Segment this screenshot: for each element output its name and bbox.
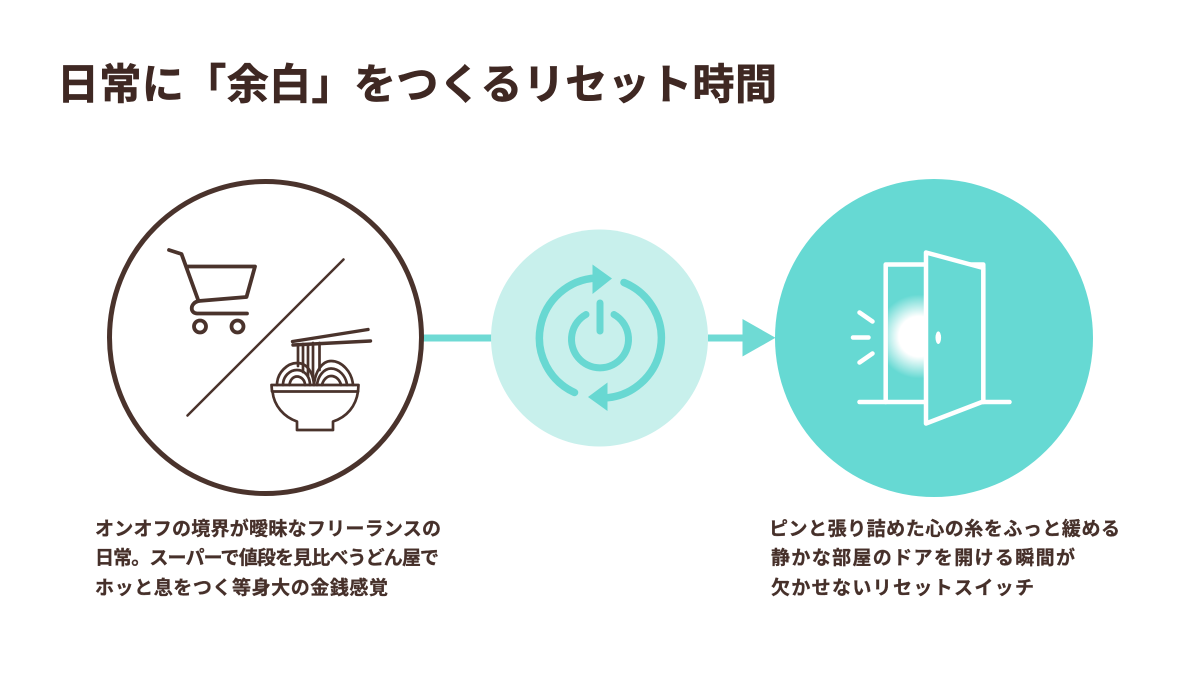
connector line: left circle to center circle — [422, 334, 492, 342]
icon: light behind door — [888, 296, 924, 378]
text block: right caption: 欠かせないリセットスイッチ — [771, 576, 1034, 599]
icon: opening door — [853, 252, 1010, 424]
text block: right caption: 静かな部屋のドアを開ける瞬間が — [771, 546, 1075, 569]
panel: daily life circle — [110, 182, 422, 494]
panel: door circle — [775, 179, 1093, 497]
divider slash — [188, 260, 344, 416]
panel: reset circle — [491, 230, 708, 446]
icon: noodle bowl — [272, 330, 370, 430]
icon: power button with cycle arrows — [539, 264, 661, 411]
text block: left caption: ホッと息をつく等身大の金銭感覚 — [95, 576, 388, 599]
text block: left caption: 日常。スーパーで値段を見比べうどん屋で — [95, 547, 439, 569]
text block: left caption: オンオフの境界が曖昧なフリーランスの — [95, 517, 441, 540]
icon: shopping cart — [169, 250, 255, 332]
title: 日常に「余白」をつくるリセット時間 — [57, 61, 777, 108]
text block: left caption — [95, 517, 441, 599]
arrow: center circle to right circle — [708, 319, 776, 356]
text block: right caption: ピンと張り詰めた心の糸をふっと緩める — [769, 517, 1120, 540]
text block: right caption — [769, 517, 1120, 599]
